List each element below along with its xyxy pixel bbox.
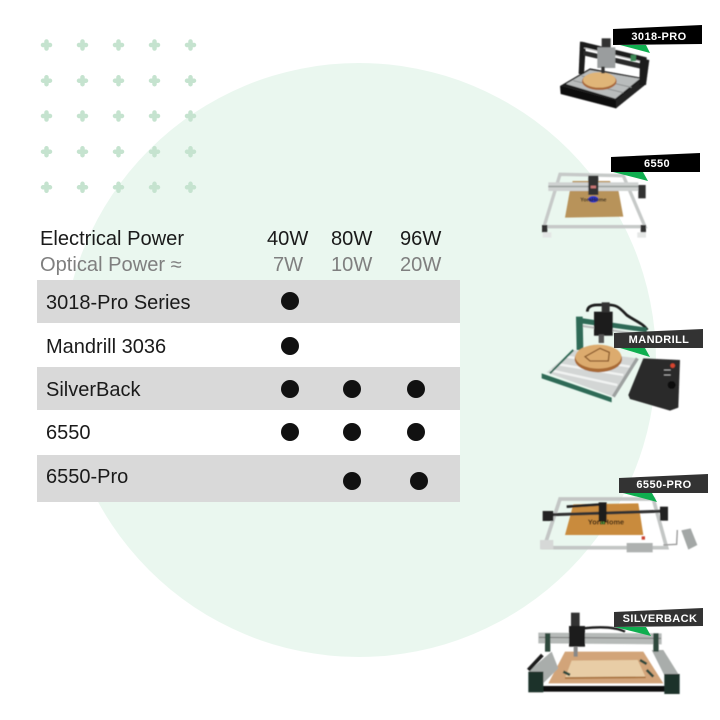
row: SilverBack: SilverBack (46, 379, 141, 401)
table (37, 228, 460, 502)
plus pattern (43, 42, 194, 191)
table header: optical power: 10W (331, 254, 372, 276)
label: SilverBack: SILVERBACK (623, 613, 697, 625)
table header: optical power (40, 254, 441, 276)
row: 6550-Pro: 6550-Pro (46, 466, 128, 488)
table header: electrical power: 80W (331, 228, 372, 250)
label: 6550: 6550 (644, 158, 670, 170)
machine: 6550 (542, 174, 646, 238)
label: 6550-Pro (619, 474, 708, 502)
machine: 6550-Pro: YoraHome (588, 517, 624, 526)
background circle (62, 63, 656, 657)
row: 6550 (37, 410, 460, 455)
table header: optical power: 20W (400, 254, 441, 276)
label: 6550 (611, 153, 700, 181)
machine: SilverBack (528, 613, 680, 694)
label: Mandrill: MANDRILL (629, 334, 689, 346)
machine: 3018-Pro (560, 38, 649, 108)
table header: optical power: Optical Power ≈ (40, 254, 182, 276)
label: 3018-PRO: 3018-PRO (631, 31, 687, 43)
row: SilverBack (37, 367, 460, 410)
row: Mandrill 3036: Mandrill 3036 (46, 336, 166, 358)
table header: electrical power: Electrical Power (40, 228, 184, 250)
label: 6550-Pro: 6550-PRO (636, 479, 692, 491)
machine: 6550: YoraHome (580, 198, 606, 204)
machine: Mandrill (542, 302, 680, 411)
machine: 6550-Pro (540, 499, 697, 552)
row: 3018-Pro Series (37, 280, 460, 323)
table header: optical power: 7W (273, 254, 303, 276)
label: 3018-PRO (613, 25, 702, 53)
row: 6550: 6550 (46, 422, 90, 444)
table header: electrical power: 40W (267, 228, 308, 250)
label: SilverBack (614, 608, 703, 636)
label: Mandrill (614, 329, 703, 357)
row: 3018-Pro Series: 3018-Pro Series (46, 292, 191, 314)
table header: electrical power (40, 228, 441, 250)
row: Mandrill 3036 (37, 323, 460, 367)
table header: electrical power: 96W (400, 228, 441, 250)
row: 6550-Pro (37, 455, 460, 502)
